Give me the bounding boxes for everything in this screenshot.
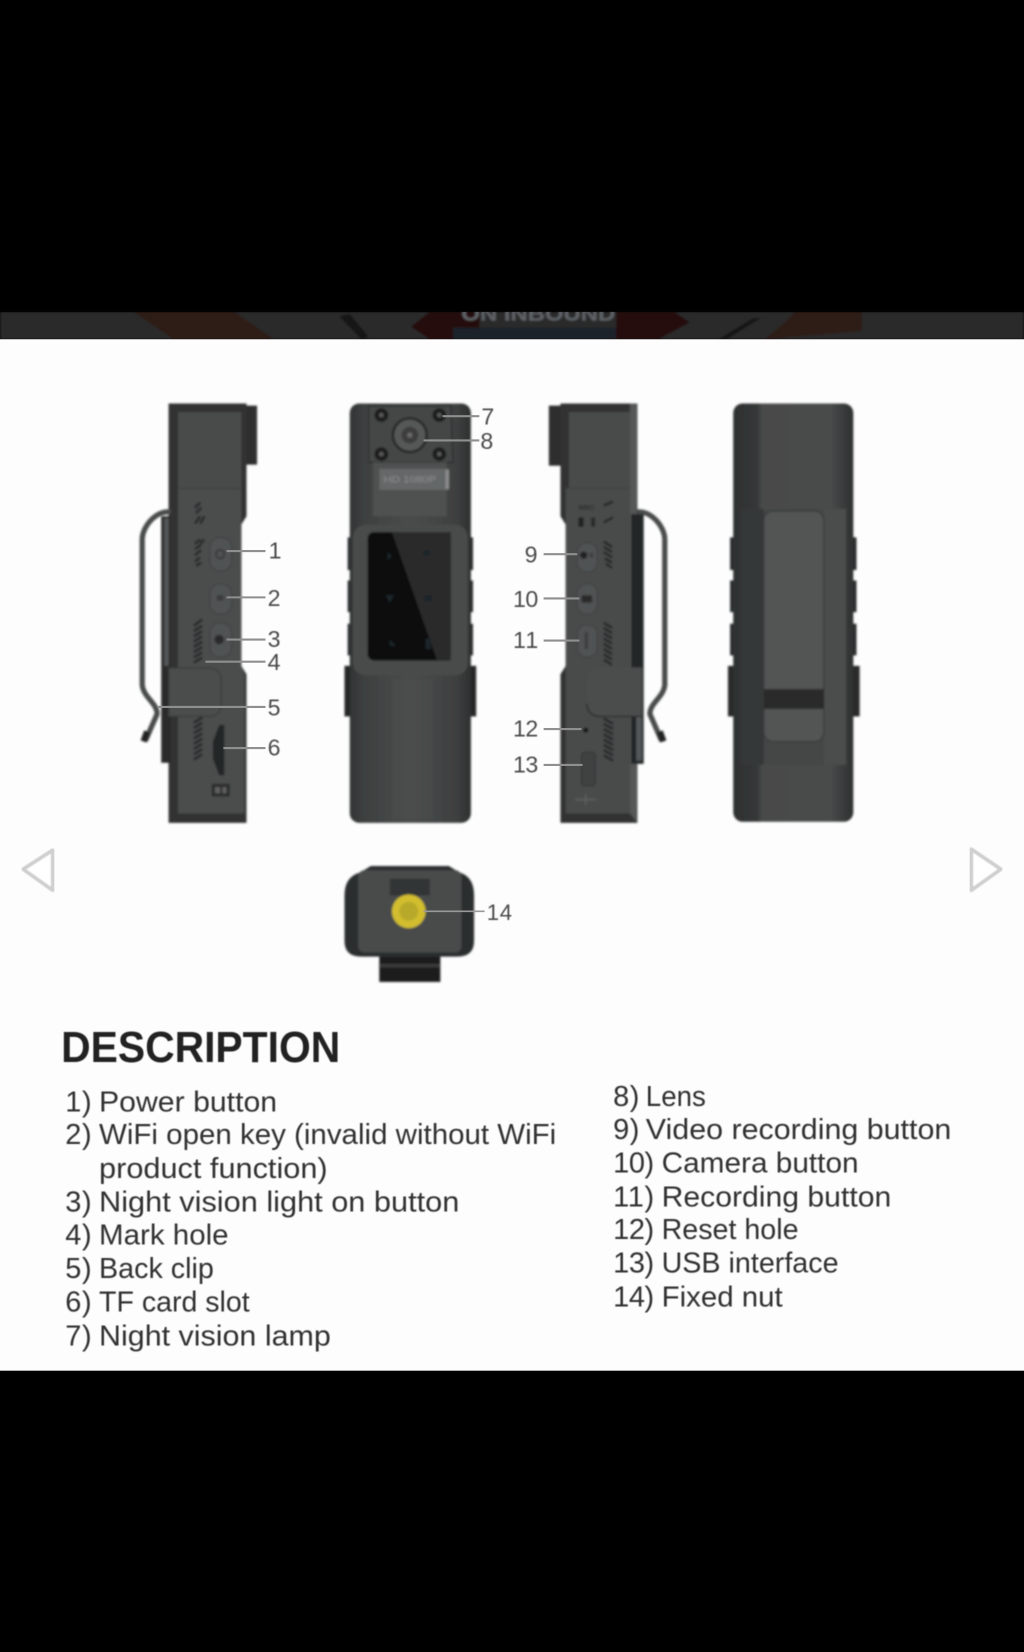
list: parts 1 to 7: 2) bbox=[65, 1119, 92, 1151]
callouts 9-13 bbox=[513, 542, 583, 777]
list: parts 8 to 14: 12) bbox=[613, 1214, 654, 1246]
clip tab bbox=[241, 406, 257, 465]
yellow fixed nut bbox=[392, 894, 426, 928]
body bbox=[169, 404, 247, 823]
buttons bbox=[577, 543, 597, 572]
cropped banner strip: ON INBOUND bbox=[461, 303, 615, 325]
callouts 9-13: 13 bbox=[513, 751, 538, 777]
list: parts 1 to 7: 5) bbox=[65, 1253, 92, 1285]
callouts 1-6 bbox=[158, 537, 282, 760]
list: parts 8 to 14 bbox=[613, 1081, 951, 1313]
USB port bbox=[582, 752, 595, 786]
callouts 7-8: 7 bbox=[481, 404, 494, 430]
list: parts 1 to 7: WiFi open key (invalid without WiFi bbox=[99, 1119, 556, 1151]
list: parts 1 to 7: Night vision lamp bbox=[99, 1320, 331, 1352]
list: parts 1 to 7: 6) bbox=[65, 1287, 92, 1319]
screen surround bbox=[353, 525, 468, 675]
list: parts 8 to 14: 9) bbox=[613, 1114, 639, 1146]
callouts 1-6: 3 bbox=[268, 626, 280, 652]
device: rear view bbox=[728, 404, 860, 822]
list: parts 8 to 14: Reset hole bbox=[662, 1214, 799, 1246]
device: front view: HD 1080P bbox=[383, 475, 436, 486]
list: parts 1 to 7: Power button bbox=[99, 1087, 277, 1119]
list: parts 8 to 14: 8) bbox=[613, 1081, 639, 1113]
list: parts 8 to 14: Fixed nut bbox=[662, 1281, 783, 1313]
list: parts 8 to 14: Lens bbox=[646, 1081, 706, 1113]
callouts 1-6: 6 bbox=[268, 734, 280, 760]
list: parts 1 to 7: 7) bbox=[65, 1320, 92, 1352]
buttons bbox=[210, 537, 232, 571]
list: parts 8 to 14: 11) bbox=[613, 1181, 654, 1213]
banner top mask bbox=[0, 295, 1024, 312]
list: parts 8 to 14: USB interface bbox=[662, 1248, 839, 1280]
list: parts 8 to 14: Recording button bbox=[662, 1181, 891, 1213]
callouts 1-6: 5 bbox=[268, 694, 280, 720]
list: parts 8 to 14: Camera button bbox=[662, 1148, 859, 1180]
body bbox=[350, 404, 471, 823]
list: parts 1 to 7: TF card slot bbox=[99, 1287, 250, 1319]
list: parts 8 to 14: 14) bbox=[613, 1281, 654, 1313]
callouts 9-13: 12 bbox=[513, 715, 538, 741]
reset hole bbox=[583, 727, 588, 733]
list: parts 8 to 14: 13) bbox=[613, 1248, 654, 1280]
device: bottom view bbox=[344, 866, 474, 982]
side buttons bbox=[348, 537, 473, 655]
list: parts 1 to 7: Mark hole bbox=[99, 1219, 229, 1251]
lower highlight bbox=[392, 680, 432, 819]
callouts 7-8 bbox=[424, 404, 494, 454]
callouts 1-6: 2 bbox=[268, 585, 280, 611]
callouts 9-13: 10 bbox=[513, 586, 538, 612]
callouts 7-8: 8 bbox=[480, 428, 493, 454]
callouts 9-13: 11 bbox=[513, 627, 538, 653]
list: parts 8 to 14: 10) bbox=[613, 1148, 654, 1180]
list: parts 1 to 7: 1) bbox=[65, 1087, 92, 1119]
arrow: next bbox=[971, 849, 1001, 890]
wire clip bbox=[142, 512, 171, 741]
clip cover bbox=[587, 668, 642, 716]
cropped banner strip bbox=[0, 303, 1024, 339]
list: parts 1 to 7: Night vision light on button bbox=[99, 1187, 459, 1219]
device: right side view bbox=[549, 404, 666, 823]
device: right side view: MIC bbox=[578, 503, 596, 512]
white panel bbox=[0, 339, 1024, 1371]
callouts 9-13: 9 bbox=[525, 542, 538, 568]
arrow: previous bbox=[23, 850, 53, 890]
heading: description: DESCRIPTION bbox=[61, 1024, 340, 1072]
wire clip bbox=[636, 512, 665, 741]
list: parts 1 to 7: product function) bbox=[99, 1153, 328, 1185]
list: parts 8 to 14: Video recording button bbox=[646, 1114, 951, 1146]
model plate bbox=[379, 469, 449, 490]
device: left side view bbox=[141, 404, 257, 823]
list: parts 1 to 7: 4) bbox=[65, 1219, 92, 1251]
vents bbox=[194, 503, 204, 760]
lens module bbox=[369, 406, 453, 463]
screen bbox=[368, 532, 451, 661]
callouts 1-6: 1 bbox=[269, 537, 282, 563]
list: parts 1 to 7: 3) bbox=[65, 1187, 92, 1219]
clip cover bbox=[169, 668, 221, 716]
TF slot bbox=[213, 725, 224, 775]
vents and mic bbox=[604, 502, 613, 761]
belt clip bbox=[764, 511, 824, 742]
callouts 1-6: 4 bbox=[268, 649, 281, 675]
list: parts 1 to 7 bbox=[65, 1087, 556, 1352]
device: front view bbox=[344, 404, 476, 823]
callout 14: 14 bbox=[487, 900, 512, 925]
list: parts 1 to 7: Back clip bbox=[99, 1253, 214, 1285]
callout 14 bbox=[424, 900, 512, 925]
